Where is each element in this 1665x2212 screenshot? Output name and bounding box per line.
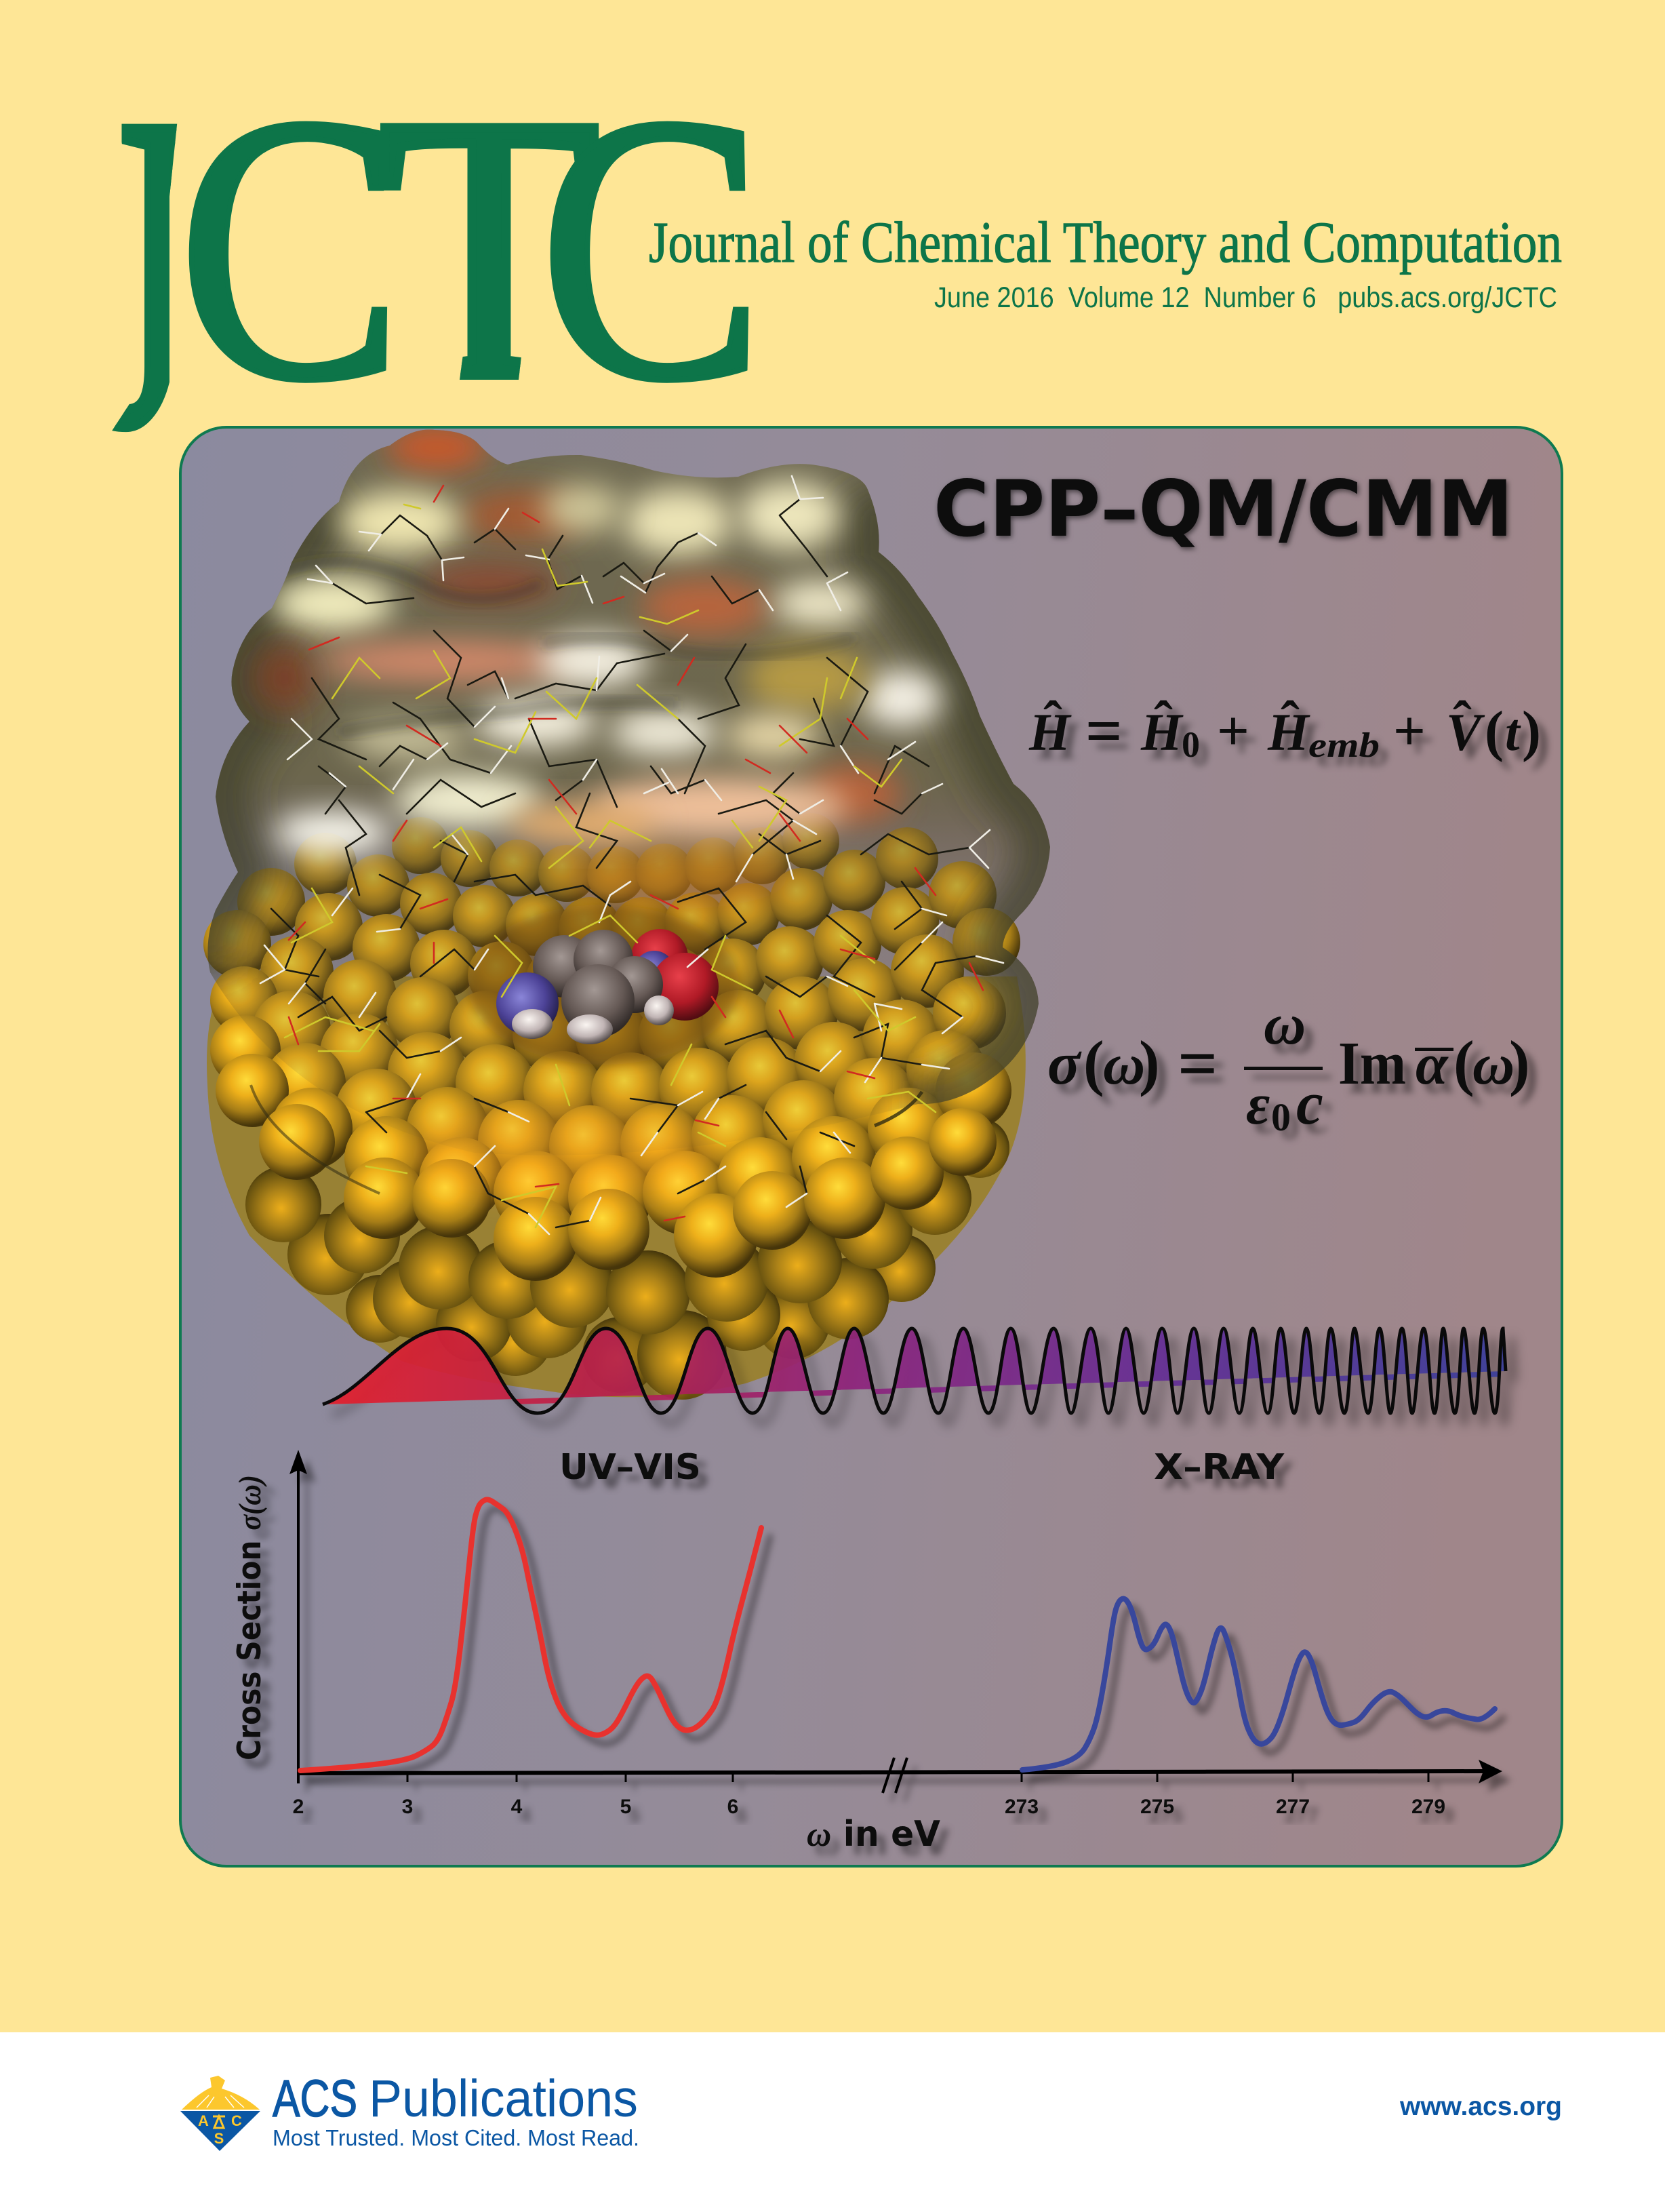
masthead: JCTC logotype: J	[93, 22, 199, 521]
footer: white band	[0, 2032, 1665, 2212]
equation: Hamiltonian: )	[1522, 700, 1541, 763]
equation: Hamiltonian: +	[1393, 700, 1426, 763]
logotype: ACS Publications: Publications	[369, 2070, 638, 2128]
tick labels: 2	[293, 1796, 304, 1818]
label: spectral regions and axis titles: ω in eV	[807, 1814, 940, 1855]
masthead: JCTC logotype: C	[539, 37, 765, 459]
tick labels: 277	[1276, 1796, 1310, 1818]
tick labels: 275	[1140, 1796, 1174, 1818]
equation: cross section: c	[1296, 1070, 1323, 1137]
tick labels: 3	[402, 1796, 413, 1818]
tagline: Most Trusted. Most Cited. Most Read.	[273, 2125, 639, 2150]
issue line: June 2016 Volume 12 Number 6 pubs.acs.org/JCTC	[934, 281, 1557, 314]
tick labels	[293, 1796, 1445, 1818]
masthead: JCTC logotype	[93, 22, 765, 521]
equation: cross section: )	[1509, 1028, 1530, 1097]
equation: Hamiltonian: t	[1505, 703, 1521, 762]
logotype: ACS Publications: ACS	[273, 2070, 357, 2128]
equation: cross section: α	[1416, 1031, 1449, 1097]
tick labels: 5	[620, 1796, 631, 1818]
equation: cross section	[1047, 991, 1530, 1139]
equation: Hamiltonian: ˆ	[1453, 690, 1472, 753]
icon: ACS logo: A	[198, 2112, 209, 2129]
equation: cross section: )	[1139, 1028, 1160, 1097]
website: www.acs.org	[1399, 2092, 1562, 2121]
equation: Hamiltonian: H	[1140, 703, 1184, 762]
equation: Hamiltonian	[1028, 690, 1541, 767]
equation: Hamiltonian: =	[1085, 694, 1123, 767]
equation: Hamiltonian: emb	[1308, 726, 1380, 765]
equation: cross section: (	[1453, 1028, 1475, 1097]
heading: CPP-QM/CMM: CPP–QM/CMM	[934, 464, 1513, 554]
equation: Hamiltonian: H	[1028, 703, 1072, 762]
label: spectral regions and axis titles: Cross Section σ(ω)	[231, 1475, 268, 1760]
equation: Hamiltonian: 0	[1182, 724, 1200, 765]
tick labels: 279	[1411, 1796, 1445, 1818]
label: spectral regions and axis titles: X–RAY	[1154, 1447, 1285, 1488]
equation: cross section: =	[1178, 1025, 1218, 1103]
chart: cross section spectra	[231, 1447, 1502, 1855]
equation: Hamiltonian: ˆ	[1043, 690, 1062, 753]
equation: Hamiltonian: ˆ	[1281, 690, 1300, 753]
icon: ACS logo: S	[214, 2130, 224, 2147]
line: X-ray spectrum	[1022, 1599, 1495, 1770]
masthead: JCTC logotype: C	[178, 37, 403, 459]
equation: cross section: ω	[1103, 1031, 1145, 1097]
tick labels: 6	[727, 1796, 738, 1818]
masthead: JCTC logotype: T	[378, 39, 600, 457]
tick labels: 4	[511, 1796, 523, 1818]
icon: ACS logo: C	[231, 2112, 242, 2129]
line: UV-VIS spectrum	[300, 1499, 761, 1771]
panel: cover artwork background	[180, 427, 1562, 1866]
equation: cross section: Im	[1338, 1030, 1406, 1097]
equation: cross section: ω	[1472, 1031, 1514, 1097]
label: spectral regions and axis titles: UV–VIS	[559, 1447, 701, 1488]
label: spectral regions and axis titles	[231, 1447, 1285, 1855]
equation: cross section: ω	[1264, 991, 1306, 1056]
equation: Hamiltonian: V	[1446, 703, 1485, 762]
illustration: central molecule in cavity	[468, 905, 739, 1065]
equation: Hamiltonian: +	[1217, 700, 1249, 763]
equation: Hamiltonian: ˆ	[1154, 690, 1173, 753]
chart: chirped laser pulse wave	[323, 1328, 1515, 1424]
equation: cross section: ε	[1246, 1071, 1270, 1137]
equation: cross section: σ	[1047, 1030, 1082, 1097]
axis: axes with arrows and break mark	[289, 1450, 1502, 1793]
icon: ACS logo	[180, 2076, 260, 2151]
equation: Hamiltonian: (	[1485, 700, 1504, 763]
equation: Hamiltonian: H	[1267, 703, 1310, 762]
tick labels: 273	[1005, 1796, 1039, 1818]
illustration: stick-model solvent molecules	[260, 476, 1003, 1234]
equation: cross section: (	[1083, 1028, 1104, 1097]
illustration: translucent protein surface	[207, 424, 1050, 1193]
equation: cross section: 0	[1271, 1095, 1291, 1139]
illustration: gold nanoparticle sphere cluster	[203, 813, 1026, 1400]
